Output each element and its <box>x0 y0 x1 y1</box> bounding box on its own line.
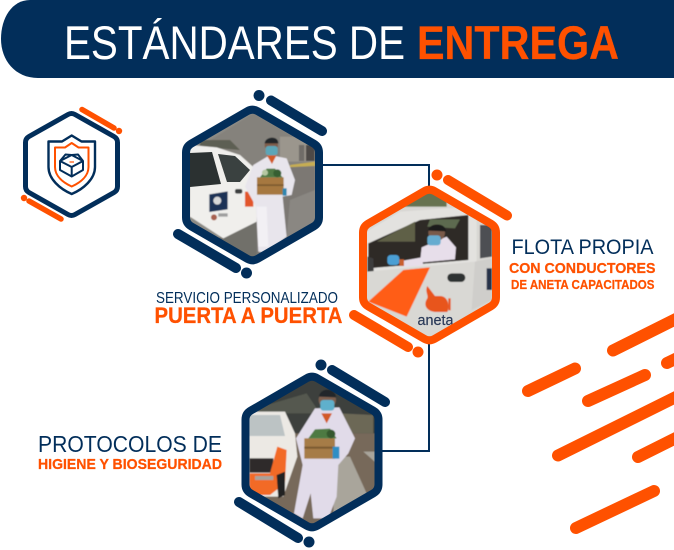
text: protocolos de higiene y bioseguridad: PROTOCOLOS DE <box>38 431 222 457</box>
aneta logo wordmark: aneta <box>418 312 454 329</box>
text: protocolos de higiene y bioseguridad: HIGIENE Y BIOSEGURIDAD <box>38 456 222 473</box>
icon: shield with box in hexagon <box>21 110 122 219</box>
photo: driver in aneta car <box>367 194 492 336</box>
photo: courier in protective suit <box>250 380 374 524</box>
decorative orange diagonal stripes <box>528 312 674 528</box>
text: flota propia: DE ANETA CAPACITADOS <box>511 277 655 292</box>
photo: courier beside car <box>190 114 315 256</box>
title: entrega: ENTREGA <box>417 16 619 69</box>
text: flota propia <box>509 235 656 292</box>
text: servicio personalizado puerta a puerta <box>154 290 342 328</box>
photo hexagon: servicio puerta a puerta <box>178 90 327 278</box>
title: estándares de: ESTÁNDARES DE <box>64 16 405 69</box>
car windows <box>190 152 250 187</box>
text: servicio personalizado puerta a puerta: PUERTA A PUERTA <box>154 303 342 328</box>
text: flota propia: CON CONDUCTORES <box>509 260 656 277</box>
photo hexagon: protocolos de higiene <box>239 360 385 548</box>
connector lines between hexagons <box>322 165 429 451</box>
header banner <box>1 0 674 78</box>
photo hexagon: flota propia <box>354 170 507 358</box>
text: servicio personalizado puerta a puerta: SERVICIO PERSONALIZADO <box>156 290 338 307</box>
text: flota propia: FLOTA PROPIA <box>512 235 654 259</box>
text: protocolos de higiene y bioseguridad <box>38 431 222 473</box>
